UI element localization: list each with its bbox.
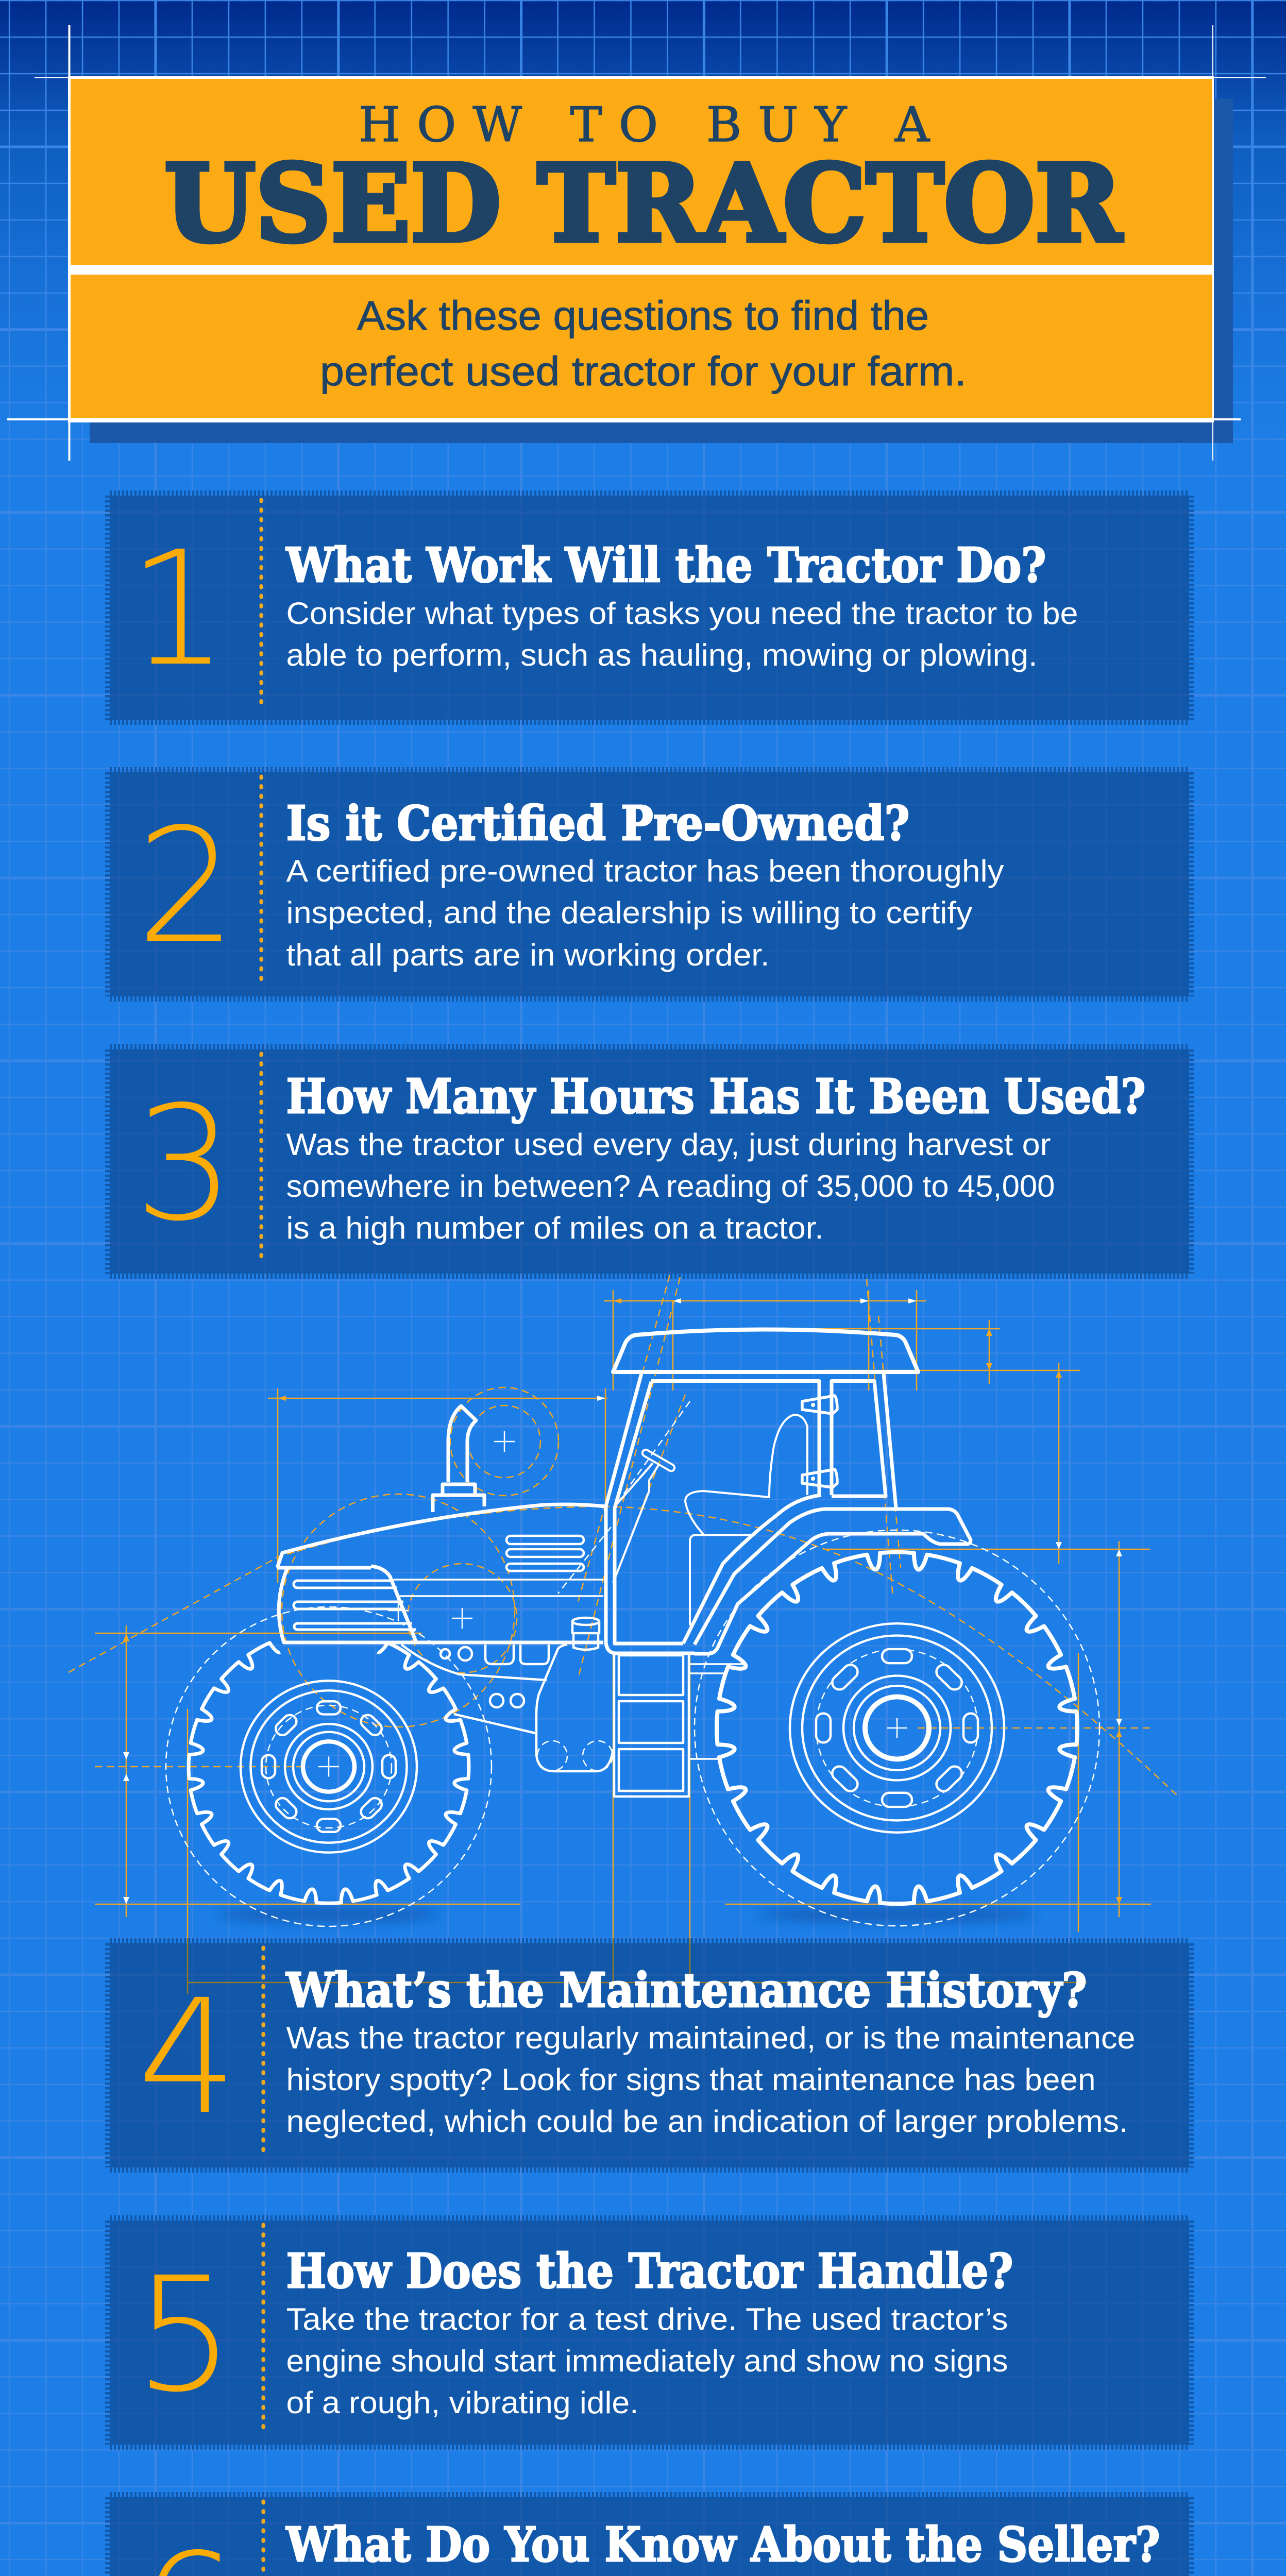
- body 4: [286, 2021, 1136, 2139]
- front rim: [241, 1681, 417, 1853]
- rear tire tread: [717, 1552, 1077, 1904]
- panel: question 4 text (above dimension line): [188, 1938, 1136, 2139]
- title: used tractor: USED TRACTOR: [164, 141, 1123, 266]
- body 5: of a rough, vibrating idle.: [286, 2385, 639, 2420]
- banner white frame: [68, 76, 1214, 422]
- number 1: 1: [128, 518, 228, 701]
- body 1: [286, 596, 1078, 672]
- panel: question 6: [107, 2495, 1191, 2576]
- engine and chassis: [401, 1618, 613, 1771]
- subtitle: perfect used tractor for your farm.: [320, 348, 967, 394]
- body 2: inspected, and the dealership is willing to certify: [286, 895, 973, 930]
- heading 2: Is it Certified Pre-Owned?: [286, 795, 910, 851]
- rear rim: [790, 1623, 1004, 1833]
- number 5: 5: [134, 2244, 234, 2427]
- title: how to buy a: HOW TO BUY A: [359, 97, 930, 152]
- front wheel: [166, 1607, 492, 1926]
- hood and grille: [277, 1431, 605, 1642]
- heading 5: How Does the Tractor Handle?: [286, 2243, 1013, 2299]
- body 2: A certified pre-owned tractor has been thoroughly: [286, 854, 1004, 888]
- body 5: [286, 2302, 1008, 2420]
- body 4: neglected, which could be an indication of larger problems.: [286, 2104, 1128, 2139]
- panel: question 2: [107, 770, 1191, 999]
- heading 4: What’s the Maintenance History?: [286, 1962, 1087, 2018]
- heading 6: What Do You Know About the Seller?: [286, 2517, 1160, 2572]
- number 4: 4: [138, 1966, 238, 2149]
- body 3: Was the tractor used every day, just during harvest or: [286, 1127, 1051, 1162]
- body 2: that all parts are in working order.: [286, 938, 770, 972]
- orange construction curves: [69, 1275, 1178, 1797]
- panel: question 5: [107, 2218, 1191, 2447]
- body 3: somewhere in between? A reading of 35,000 to 45,000: [286, 1169, 1055, 1204]
- body 3: is a high number of miles on a tractor.: [286, 1211, 823, 1245]
- steps: [614, 1653, 743, 1797]
- header banner: [7, 25, 1266, 461]
- subtitle panel: [71, 275, 1212, 418]
- panel: question 3: [107, 1047, 1191, 1276]
- body 3: [286, 1127, 1055, 1245]
- body 5: Take the tractor for a test drive. The used tractor’s: [286, 2302, 1008, 2336]
- heading 1: What Work Will the Tractor Do?: [286, 537, 1046, 593]
- tractor blueprint illustration: [69, 1275, 1178, 1938]
- front tire tread: [189, 1640, 469, 1903]
- body 5: engine should start immediately and show no signs: [286, 2344, 1008, 2378]
- dimension lines: [95, 1290, 1151, 1938]
- title panel: [71, 79, 1212, 265]
- cab: [606, 1329, 918, 1653]
- heading 3: How Many Hours Has It Been Used?: [286, 1069, 1146, 1124]
- crop lines: [7, 25, 1266, 461]
- body 4: Was the tractor regularly maintained, or is the maintenance: [286, 2021, 1136, 2055]
- banner shadow: [90, 99, 1233, 443]
- body 1: able to perform, such as hauling, mowing or plowing.: [286, 638, 1037, 672]
- subtitle: [320, 293, 967, 394]
- dimension line through card 4: [188, 1938, 1087, 1994]
- exhaust stack: [433, 1406, 484, 1512]
- fender: [683, 1495, 971, 1654]
- wheel shadows: [218, 1906, 1036, 1923]
- body 1: Consider what types of tasks you need the tractor to be: [286, 596, 1078, 631]
- body 4: history spotty? Look for signs that maintenance has been: [286, 2062, 1095, 2097]
- number 3: 3: [134, 1073, 234, 1256]
- subtitle: Ask these questions to find the: [357, 293, 929, 338]
- panel: question 1: [107, 493, 1191, 722]
- body 2: [286, 854, 1004, 972]
- number 2: 2: [137, 795, 236, 978]
- panel: question 4: [107, 1941, 1191, 2170]
- rear wheel: [695, 1530, 1099, 1926]
